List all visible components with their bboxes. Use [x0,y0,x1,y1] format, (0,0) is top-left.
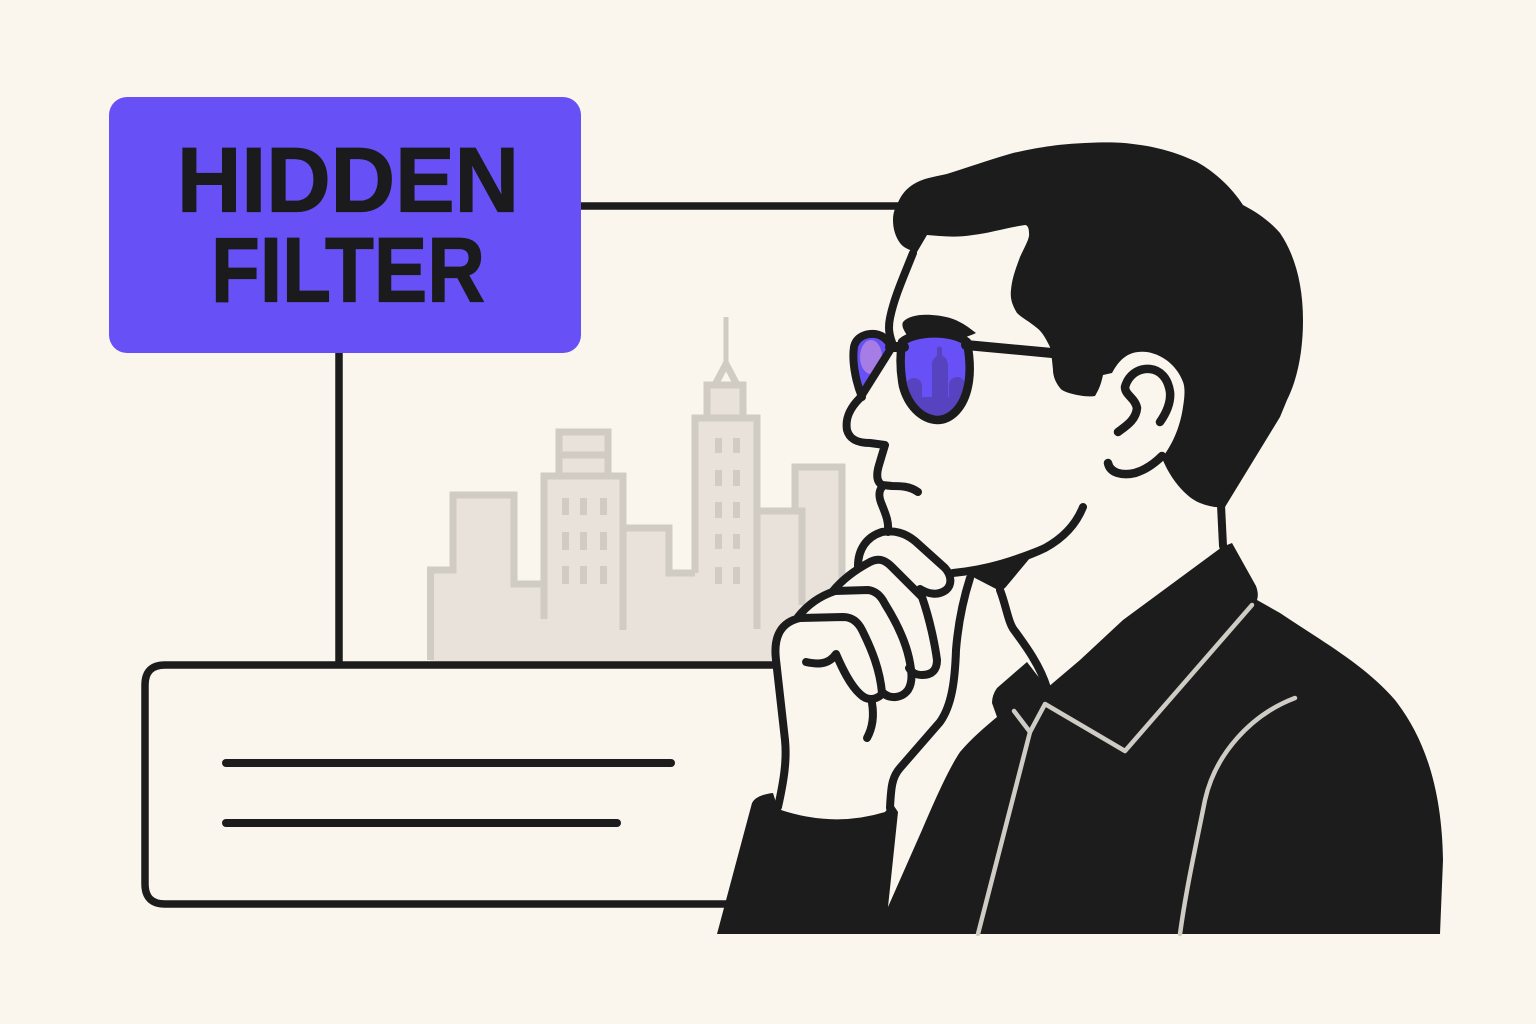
illustration: hidden filter [109,97,1443,936]
ear [1108,369,1170,474]
jacket seams [978,605,1295,934]
neck lines [1000,505,1223,688]
neck shadow [953,546,1040,591]
text box with placeholder lines [145,665,790,904]
jacket and sleeve [717,543,1443,934]
hand and forearm fill [775,532,970,822]
connector: label to text box [335,350,343,665]
face outline [847,253,1083,573]
connector: label to head [578,202,905,210]
lens reflection: skyline [906,346,964,416]
hand lines [775,531,970,808]
faded city skyline [430,317,842,662]
label: hidden filter: HIDDEN [177,130,519,232]
label: hidden filter: FILTER [211,220,485,322]
eyebrow [902,315,976,338]
person in profile [717,142,1443,934]
label: hidden filter [109,97,581,353]
hair [893,142,1303,507]
sunglasses [853,315,1052,425]
